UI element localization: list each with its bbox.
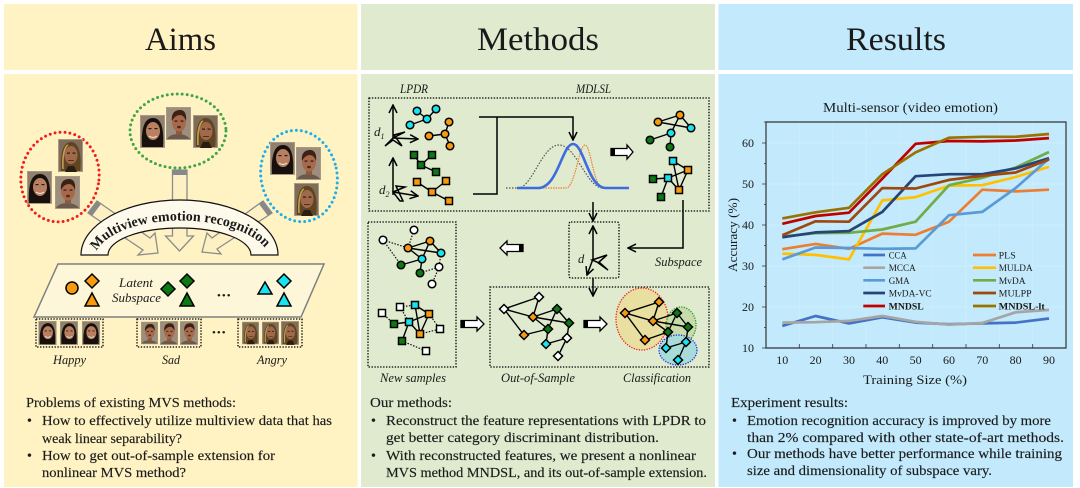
text block: our methods: Reconstruct the feature representations with LPDR to [386, 414, 706, 429]
ellipsis dots between strips: ••• [212, 327, 227, 339]
graph: cyan cluster [406, 105, 440, 129]
legend: MvDA [999, 277, 1026, 287]
legend [863, 252, 1046, 312]
text block: experiment results: Emotion recognition accuracy is improved by more [747, 414, 1051, 429]
arch: multiview emotion recognition: Multiview emotion recognition [89, 210, 268, 251]
panel: Methods header [361, 4, 715, 70]
label: Sad: Sad [162, 353, 181, 367]
text block: problems of existing methods: Problems of existing MVS methods: [26, 396, 236, 411]
y axis numbers: 50 [742, 177, 754, 191]
text block: our methods: • [371, 449, 376, 464]
hollow arrow: to new samples [500, 241, 523, 255]
x axis numbers: 30 [843, 353, 855, 367]
legend: MvDA-VC [889, 290, 932, 300]
dotted box: LPDR and MDLSL [369, 98, 709, 211]
heading: Aims: Aims [145, 22, 216, 58]
axes: d: d [578, 252, 585, 266]
line chart: multi-sensor accuracy [725, 100, 1066, 387]
connector: into distributions [473, 117, 573, 194]
text block: experiment results: size and dimensionality of subspace vary. [747, 464, 992, 479]
gridlines and ticks [762, 122, 1066, 348]
y axis numbers [742, 136, 754, 355]
hollow arrow: to subspace graph [611, 145, 633, 159]
text block: problems of existing methods [26, 396, 332, 481]
label: Latent Subspace: Subspace [112, 290, 161, 305]
x axis numbers: 90 [1043, 353, 1055, 367]
panel: Results body [718, 74, 1073, 487]
y axis numbers: 10 [742, 341, 754, 355]
dotted box: new samples [368, 222, 456, 367]
x axis numbers: 20 [810, 353, 822, 367]
legend: MULPP [999, 290, 1032, 300]
text block: experiment results [731, 396, 1064, 479]
graph: squares merged [650, 158, 692, 200]
text block: experiment results: Experiment results: [731, 396, 848, 411]
axes: d1: d [374, 124, 380, 139]
label: Angry: Angry [256, 353, 287, 367]
legend: MNDSL-lt [999, 302, 1046, 312]
ellipsis dots in plane: ••• [217, 290, 232, 302]
view group: left faces [14, 126, 106, 228]
text block: our methods: MVS method MNDSL, and its out-of-sample extension. [386, 466, 707, 481]
label: Out-of-Sample: Out-of-Sample [501, 371, 575, 385]
view group: right faces [252, 123, 346, 229]
dotted box: out-of-sample and classification [490, 287, 709, 367]
series lines [782, 134, 1049, 326]
axes: d1 [374, 105, 418, 146]
x axis numbers [776, 353, 1055, 367]
x axis numbers: 80 [1010, 353, 1022, 367]
axes: d1: 1 [380, 132, 384, 141]
y axis title: Accuracy (%) [725, 198, 740, 272]
legend: GMA [889, 277, 910, 287]
text block: problems of existing methods: nonlinear MVS method? [42, 466, 186, 481]
text block: problems of existing methods: How to effectively utilize multiview data that has [42, 414, 332, 429]
y axis numbers: 20 [742, 300, 754, 314]
panel: Methods body [361, 74, 715, 487]
x axis numbers: 10 [776, 353, 788, 367]
view group: front faces [130, 94, 226, 168]
markers: cyan class [258, 274, 291, 306]
graph: out-of-sample [500, 292, 574, 360]
label: Subspace: Subspace [655, 255, 702, 269]
y axis numbers: 60 [742, 136, 754, 150]
graph: orange cluster [425, 118, 454, 150]
arrow: down to d box [592, 202, 594, 221]
label: LPDR: LPDR [399, 82, 428, 96]
legend: MNDSL [889, 302, 924, 312]
graph: new samples squares [378, 302, 444, 354]
diagram: multiview emotion recognition [19, 92, 339, 367]
arrow: down to out-of-sample [592, 278, 594, 296]
latent subspace plane [34, 264, 324, 317]
chart title: Multi-sensor (video emotion) [823, 100, 998, 115]
text block: experiment results: than 2% compared with other state-of-art methods. [747, 431, 1064, 446]
text block: experiment results: • [732, 447, 737, 462]
x axis numbers: 60 [943, 353, 955, 367]
hollow arrow: out-of-sample to classification [584, 317, 607, 331]
markers: orange class [66, 274, 99, 306]
graph: green squares [410, 152, 440, 176]
x axis numbers: 70 [976, 353, 988, 367]
text block: problems of existing methods: • [27, 449, 32, 464]
axes: d2: 2 [386, 190, 390, 199]
panel: Aims body [4, 74, 358, 487]
label: Happy: Happy [52, 353, 86, 367]
y axis numbers: 30 [742, 259, 754, 273]
text block: problems of existing methods: How to get out-of-sample extension for [42, 449, 275, 464]
legend: PLS [999, 252, 1016, 262]
graph: classification [620, 298, 692, 364]
panel: Results header [718, 4, 1073, 70]
label: Classification: Classification [623, 371, 691, 385]
heading: Methods: Methods [477, 22, 599, 58]
distribution curves [506, 144, 629, 188]
graph: orange squares [414, 178, 452, 204]
heading: Results: Results [846, 22, 946, 58]
label: MDLSL: MDLSL [575, 82, 611, 96]
grey arrow: left view [88, 201, 158, 255]
markers: green class [161, 274, 194, 306]
label: Latent Subspace: Latent [118, 275, 153, 290]
panel: Aims header [4, 4, 358, 70]
text block: our methods: get better category discriminant distribution. [386, 431, 659, 446]
label: New samples: New samples [379, 371, 446, 385]
text block: our methods [370, 396, 707, 481]
x axis title: Training Size (%) [863, 372, 967, 387]
label: Latent Subspace [112, 275, 161, 305]
legend: CCA [889, 252, 907, 262]
connector: subspace graph to d box [628, 200, 683, 248]
diagram: methods pipeline [368, 82, 709, 385]
legend: MULDA [999, 264, 1033, 274]
text block: experiment results: • [732, 414, 737, 429]
graph: new samples circles [379, 226, 445, 288]
legend: MCCA [889, 264, 916, 274]
text block: problems of existing methods: weak linear separability? [42, 432, 182, 447]
x axis numbers: 40 [876, 353, 888, 367]
axes: d2: d [379, 182, 386, 197]
text block: experiment results: Our methods have better performance while training [747, 447, 1062, 462]
text block: our methods: • [371, 414, 376, 429]
plot frame [766, 122, 1066, 348]
grey arrow: centre view [166, 170, 194, 251]
face strip: Sad [137, 319, 201, 347]
face strip: Angry [238, 319, 302, 347]
hollow arrow: new samples to out-of-sample [461, 317, 484, 331]
text block: problems of existing methods: • [27, 414, 32, 429]
classification regions [616, 288, 697, 365]
y axis numbers: 40 [742, 218, 754, 232]
dotted box: subspace d [569, 222, 619, 278]
x axis numbers: 50 [910, 353, 922, 367]
text block: our methods: With reconstructed features, we present a nonlinear [386, 449, 696, 464]
face strip: Happy [36, 319, 103, 347]
graph: circles merged [646, 111, 695, 151]
axes: d [578, 226, 608, 275]
text block: our methods: Our methods: [370, 396, 452, 411]
axes: d2 [379, 158, 418, 201]
grey arrow: right view [202, 201, 272, 254]
